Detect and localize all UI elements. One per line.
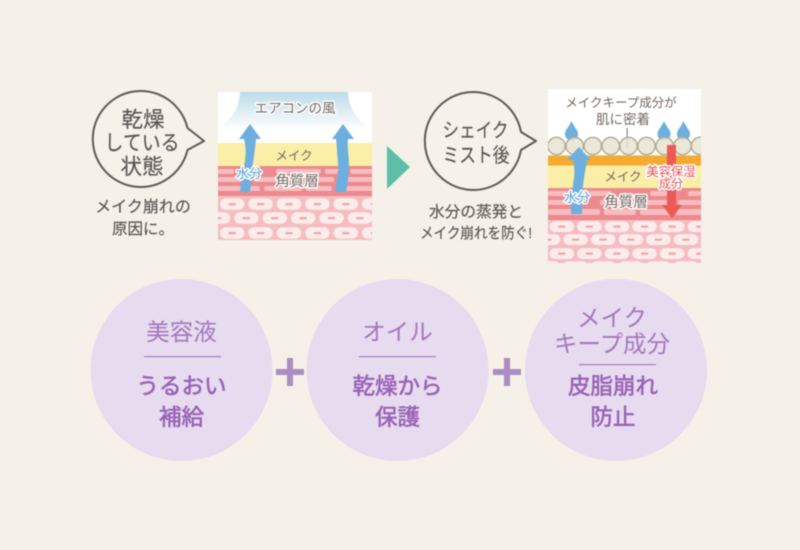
- stratum corneum: [218, 166, 372, 196]
- circle: oil: [306, 279, 488, 461]
- speech bubble: after shake mist: [425, 92, 536, 190]
- water droplets: [565, 121, 690, 140]
- plus sign: [493, 358, 521, 386]
- circle: makeup keep ingredients: [525, 279, 707, 461]
- caption: cause of makeup collapse: [95, 198, 191, 238]
- circle: oil: 乾燥から: [352, 374, 443, 399]
- speech bubble: after shake mist: ミスト後: [442, 144, 510, 167]
- caption: prevents evaporation and makeup collapse: メイク崩れを防ぐ!: [420, 225, 532, 242]
- arrow: moisture right: [332, 124, 354, 192]
- label: moisturizing ingredients: 美容保湿: [646, 164, 696, 179]
- label: makeup: メイク: [604, 170, 642, 184]
- label: keep ingredients adhere to skin: [565, 95, 677, 127]
- white panel: [548, 89, 701, 155]
- circle: makeup keep ingredients: キープ成分: [554, 331, 670, 357]
- speech bubble: dry state: している: [104, 132, 180, 155]
- speech bubble: after shake mist: シェイク: [442, 119, 508, 142]
- caption: prevents evaporation and makeup collapse: [420, 203, 532, 242]
- label: moisture: 水分: [564, 190, 590, 205]
- circle: serum: [90, 279, 272, 461]
- arrow: teal next step: [387, 146, 410, 189]
- air panel: [218, 92, 372, 144]
- diagram: after mist: [548, 89, 709, 263]
- orange film layer: [548, 156, 701, 166]
- circle: makeup keep ingredients: 皮脂崩れ: [568, 374, 658, 399]
- skin cells: [548, 220, 701, 263]
- circle: makeup keep ingredients: 防止: [590, 405, 636, 430]
- speech bubble: dry state: [93, 91, 204, 187]
- label: moisturizing ingredients: 成分: [659, 177, 684, 191]
- speech bubble: dry state: 状態: [120, 155, 164, 179]
- stratum corneum: [548, 188, 701, 220]
- label: stratum corneum: 角質層: [275, 172, 319, 190]
- air conditioner wind: [218, 92, 372, 144]
- leader line: [626, 128, 628, 148]
- arrow: moisture left: [239, 124, 261, 192]
- caption: prevents evaporation and makeup collapse: 水分の蒸発と: [429, 203, 523, 221]
- circle: oil: オイル: [362, 319, 433, 345]
- skin cells: [218, 196, 372, 240]
- circle: serum: 美容液: [146, 319, 217, 345]
- arrow: moisture rising: [567, 147, 591, 214]
- label: makeup: メイク: [275, 149, 313, 163]
- speech bubble: dry state: 乾燥: [121, 108, 165, 132]
- makeup layer: [218, 143, 372, 166]
- caption: cause of makeup collapse: 原因に。: [112, 221, 174, 238]
- label: moisture: 水分: [236, 166, 262, 181]
- keep ingredient particles: [548, 137, 709, 155]
- label: keep ingredients adhere to skin: 肌に密着: [596, 111, 650, 127]
- arrow: beauty ingredients descending: [662, 145, 682, 218]
- label: air conditioner wind: エアコンの風: [254, 101, 336, 116]
- circle: makeup keep ingredients: メイク: [577, 305, 647, 331]
- label: moisturizing ingredients: [646, 164, 696, 191]
- caption: cause of makeup collapse: メイク崩れの: [95, 198, 191, 216]
- circle: serum: うるおい: [136, 374, 227, 399]
- diagram: dry skin: [218, 92, 372, 240]
- label: stratum corneum: 角質層: [604, 193, 648, 211]
- label: keep ingredients adhere to skin: メイクキープ成分が: [565, 95, 677, 110]
- makeup layer: [548, 165, 701, 188]
- circle: oil: 保護: [375, 405, 420, 430]
- plus sign: [276, 358, 304, 386]
- circle: serum: 補給: [159, 405, 204, 430]
